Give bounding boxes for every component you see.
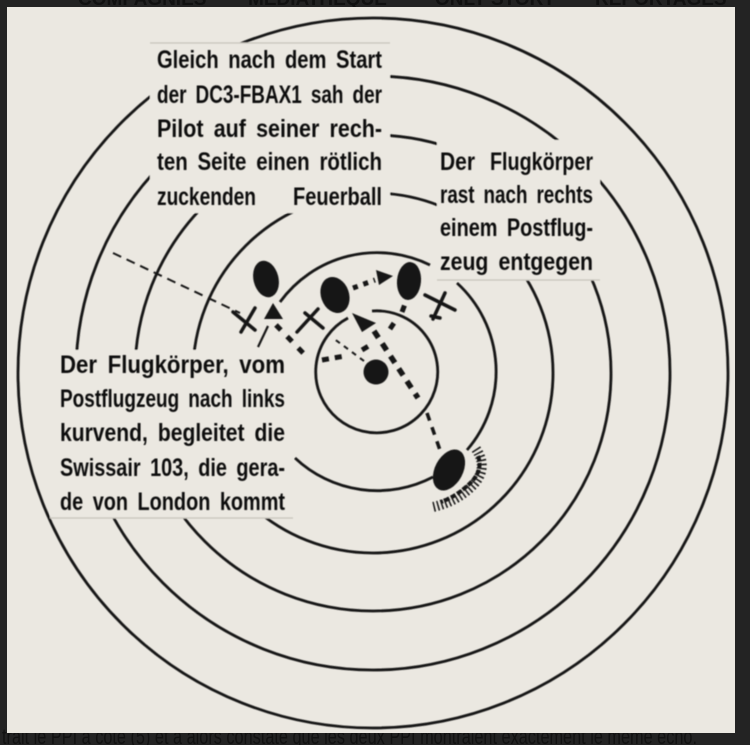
flight path: thin dashes from centre: [333, 338, 364, 361]
aircraft blob: middle: [316, 273, 354, 317]
inner rings: [280, 253, 496, 491]
callout: after takeoff: der DC3-FBAX1 sah der: [157, 81, 382, 109]
plane marker: right: [425, 293, 455, 319]
aircraft blob: left: [249, 258, 283, 300]
callout: after takeoff: [157, 46, 383, 211]
callout: after takeoff: Feuerball: [293, 183, 382, 211]
callout: flying object to the left: Postflugzeug nach links: [60, 385, 285, 413]
flight path: thick route top: [353, 280, 375, 288]
callout: flying object to the right: zeug entgegen: [440, 248, 593, 276]
explosion blob with burst: [426, 444, 482, 507]
callout: after takeoff: ten Seite einen rötlich: [157, 148, 382, 176]
callout: after takeoff: Gleich nach dem Start: [157, 46, 383, 74]
callout: flying object to the left: de von London kommt: [60, 488, 286, 516]
aircraft blob: right: [395, 261, 423, 301]
callout: flying object to the left: Der Flugkörper, vom: [60, 351, 285, 379]
radar centre: [364, 360, 388, 384]
flight path: thick route to explosion: [374, 331, 418, 398]
callout: flying object to the right: [440, 148, 593, 276]
callout: flying object to the left: kurvend, begleitet die: [60, 419, 285, 447]
flight path: thin dashed track from left: [113, 253, 240, 313]
arrowhead: middle: [352, 313, 376, 332]
callout: after takeoff: zuckenden: [157, 183, 256, 211]
callout: flying object to the right: Flugkörper: [490, 148, 593, 176]
plane marker: left: [233, 308, 255, 332]
box edge lines: [50, 43, 600, 518]
callout: flying object to the left: [60, 351, 286, 516]
flight path: thick route across inner ring: [322, 304, 405, 360]
flight path: thick route up to left arrow: [276, 325, 306, 356]
flight path: lower dashes to explosion: [427, 413, 441, 453]
text masks: [50, 43, 600, 518]
flight path: thin branch: [258, 326, 268, 347]
arrowhead: left: [264, 303, 283, 319]
plane marker: middle: [297, 309, 323, 332]
callout: flying object to the left: Swissair 103, die gera-: [60, 454, 285, 482]
callout: flying object to the right: Der: [440, 148, 475, 176]
callout: after takeoff: Pilot auf seiner rech-: [157, 115, 382, 143]
callout: flying object to the right: rast nach rechts: [440, 181, 593, 209]
arrowhead: top right: [376, 270, 393, 285]
callout: flying object to the right: einem Postflug-: [440, 214, 593, 242]
